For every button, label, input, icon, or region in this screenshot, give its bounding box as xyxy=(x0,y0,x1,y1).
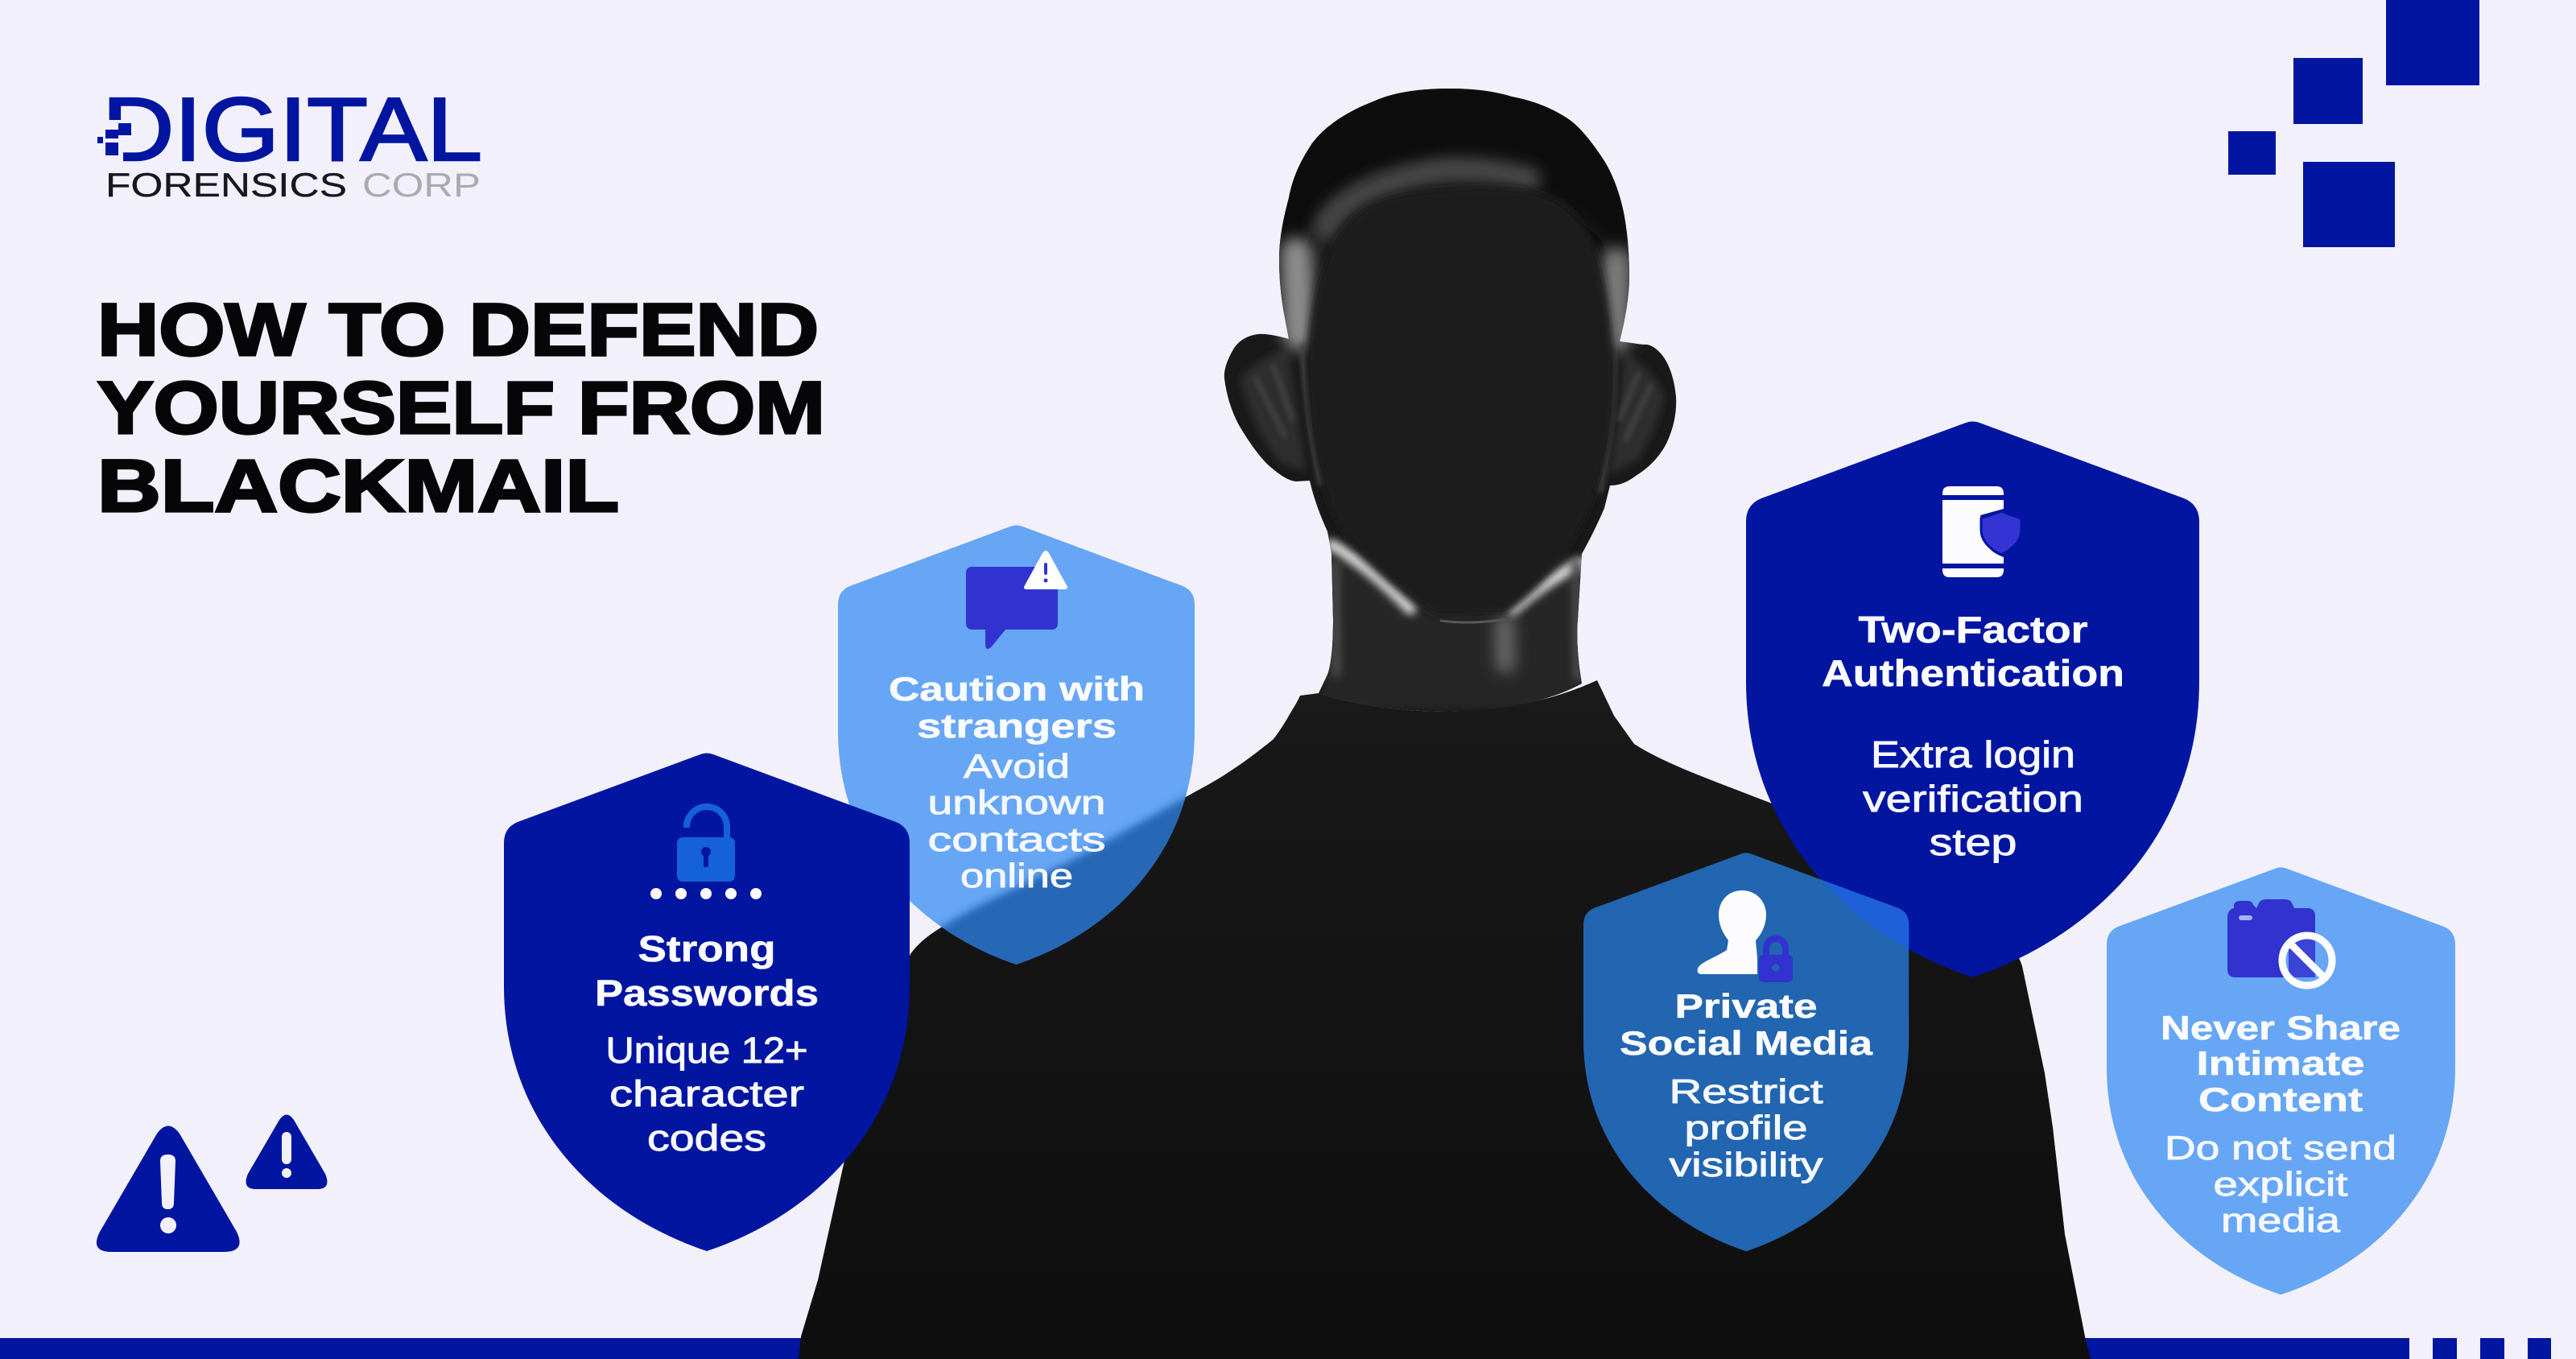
text: caution: contacts xyxy=(927,820,1106,858)
icon: warning triangles xyxy=(97,1114,327,1252)
text: two-factor: Authentication xyxy=(1822,652,2124,694)
text: caution xyxy=(889,670,1145,894)
text: strong passwords: Strong xyxy=(638,928,776,969)
title xyxy=(97,289,825,527)
text: private: profile xyxy=(1684,1109,1808,1146)
text: strong passwords: codes xyxy=(647,1117,766,1159)
text: private: Social Media xyxy=(1620,1024,1873,1062)
text: never share: media xyxy=(2221,1201,2341,1239)
panel: never share intimate content xyxy=(2107,867,2455,1295)
panel: two-factor authentication xyxy=(1746,422,2199,977)
text: caution: unknown xyxy=(927,783,1106,821)
shield overlap with two-factor shield xyxy=(1821,879,1909,949)
bottom stripe bar xyxy=(0,1338,2551,1359)
text: strong passwords: Passwords xyxy=(595,973,819,1014)
head rim lighting xyxy=(1240,81,1665,708)
text: never share: explicit xyxy=(2214,1165,2348,1203)
text: two-factor: Extra login xyxy=(1871,733,2075,775)
text: never share: Do not send xyxy=(2165,1129,2396,1167)
title: BLACKMAIL xyxy=(97,445,619,527)
shield: private xyxy=(1583,853,1909,1251)
text: private: Private xyxy=(1674,987,1818,1025)
text: two-factor: Two-Factor xyxy=(1858,609,2088,651)
text: strong passwords xyxy=(595,928,819,1159)
text: never share: Content xyxy=(2198,1080,2363,1118)
panel: caution with strangers xyxy=(838,525,1195,965)
text: private xyxy=(1620,987,1873,1183)
text: two-factor: verification xyxy=(1863,778,2083,820)
silhouette body xyxy=(799,680,2091,1359)
icon: chat bubble warning xyxy=(966,551,1067,649)
text: caution: Avoid xyxy=(964,747,1070,785)
shield overlap with silhouette xyxy=(937,791,1187,965)
text: two-factor xyxy=(1822,609,2124,863)
logo: Digital Forensics Corp: DIGITAL xyxy=(102,80,482,180)
decorative squares top right xyxy=(2228,0,2479,247)
text: caution: strangers xyxy=(917,707,1117,745)
shield: never share xyxy=(2107,867,2455,1295)
faceless oval xyxy=(1307,188,1615,616)
icon: person with lock xyxy=(1698,890,1793,982)
icon: camera with prohibition sign xyxy=(2227,899,2333,986)
panel: strong passwords xyxy=(504,754,910,1251)
silhouette of faceless person xyxy=(799,81,2091,1359)
silhouette head and neck xyxy=(1224,89,1676,712)
text: caution: online xyxy=(960,857,1073,894)
text: two-factor: step xyxy=(1929,821,2017,863)
title: HOW TO DEFEND xyxy=(97,289,819,371)
icon: phone with shield xyxy=(1942,486,2021,577)
title: YOURSELF FROM xyxy=(97,367,825,449)
text: caution: Caution with xyxy=(889,670,1145,708)
logo: Digital Forensics Corp: CORP xyxy=(362,166,481,204)
icon: open padlock and dots xyxy=(650,807,762,899)
text: private: Restrict xyxy=(1670,1072,1823,1110)
logo: Digital Forensics Corp: FORENSICS xyxy=(105,166,347,204)
text: strong passwords: character xyxy=(609,1073,804,1114)
text: never share: Intimate xyxy=(2196,1044,2365,1082)
shield: strong passwords xyxy=(504,754,910,1251)
shield: two-factor xyxy=(1746,422,2199,977)
text: never share: Never Share xyxy=(2161,1009,2401,1047)
shield: caution xyxy=(838,525,1195,965)
text: never share xyxy=(2161,1009,2401,1239)
panel: private social media xyxy=(1583,853,1909,1251)
text: strong passwords: Unique 12+ xyxy=(605,1030,808,1071)
text: private: visibility xyxy=(1670,1146,1823,1183)
